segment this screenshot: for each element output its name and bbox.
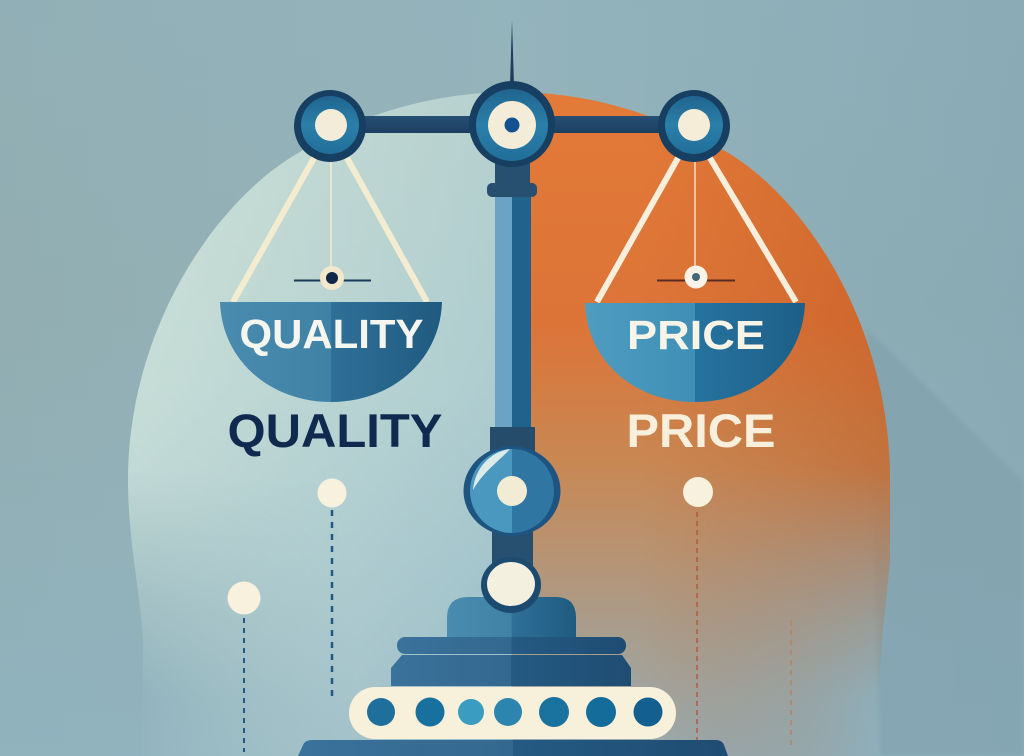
top spike xyxy=(510,20,514,85)
pan label: quality: QUALITY xyxy=(240,311,424,357)
right faint dashed line xyxy=(790,620,792,745)
pedestal tier 2 xyxy=(391,655,631,686)
quality pan assembly xyxy=(220,158,442,402)
base plinth xyxy=(298,740,728,756)
center pivot xyxy=(469,81,555,167)
heading: price: PRICE xyxy=(626,404,776,457)
pedestal tier 1 xyxy=(397,637,626,654)
pan label: price: PRICE xyxy=(627,312,765,358)
pedestal dome xyxy=(447,597,576,637)
quality hanging dot with dashed line xyxy=(318,478,346,700)
beam xyxy=(350,116,670,133)
lower pivot disc xyxy=(464,446,560,536)
price pan assembly xyxy=(585,158,805,402)
heading: quality: QUALITY xyxy=(228,404,442,457)
right pivot xyxy=(658,90,730,162)
price hanging dot with dashed line xyxy=(683,477,713,740)
cast shadow on right xyxy=(866,328,1024,756)
cream band with seven blue dots xyxy=(349,687,676,739)
base ball joint xyxy=(481,557,541,613)
left hanging dot with dashed line xyxy=(228,582,260,752)
arch: price side xyxy=(512,92,890,756)
arch: quality side xyxy=(128,92,512,756)
left pivot xyxy=(294,90,366,162)
scale column xyxy=(487,160,537,570)
